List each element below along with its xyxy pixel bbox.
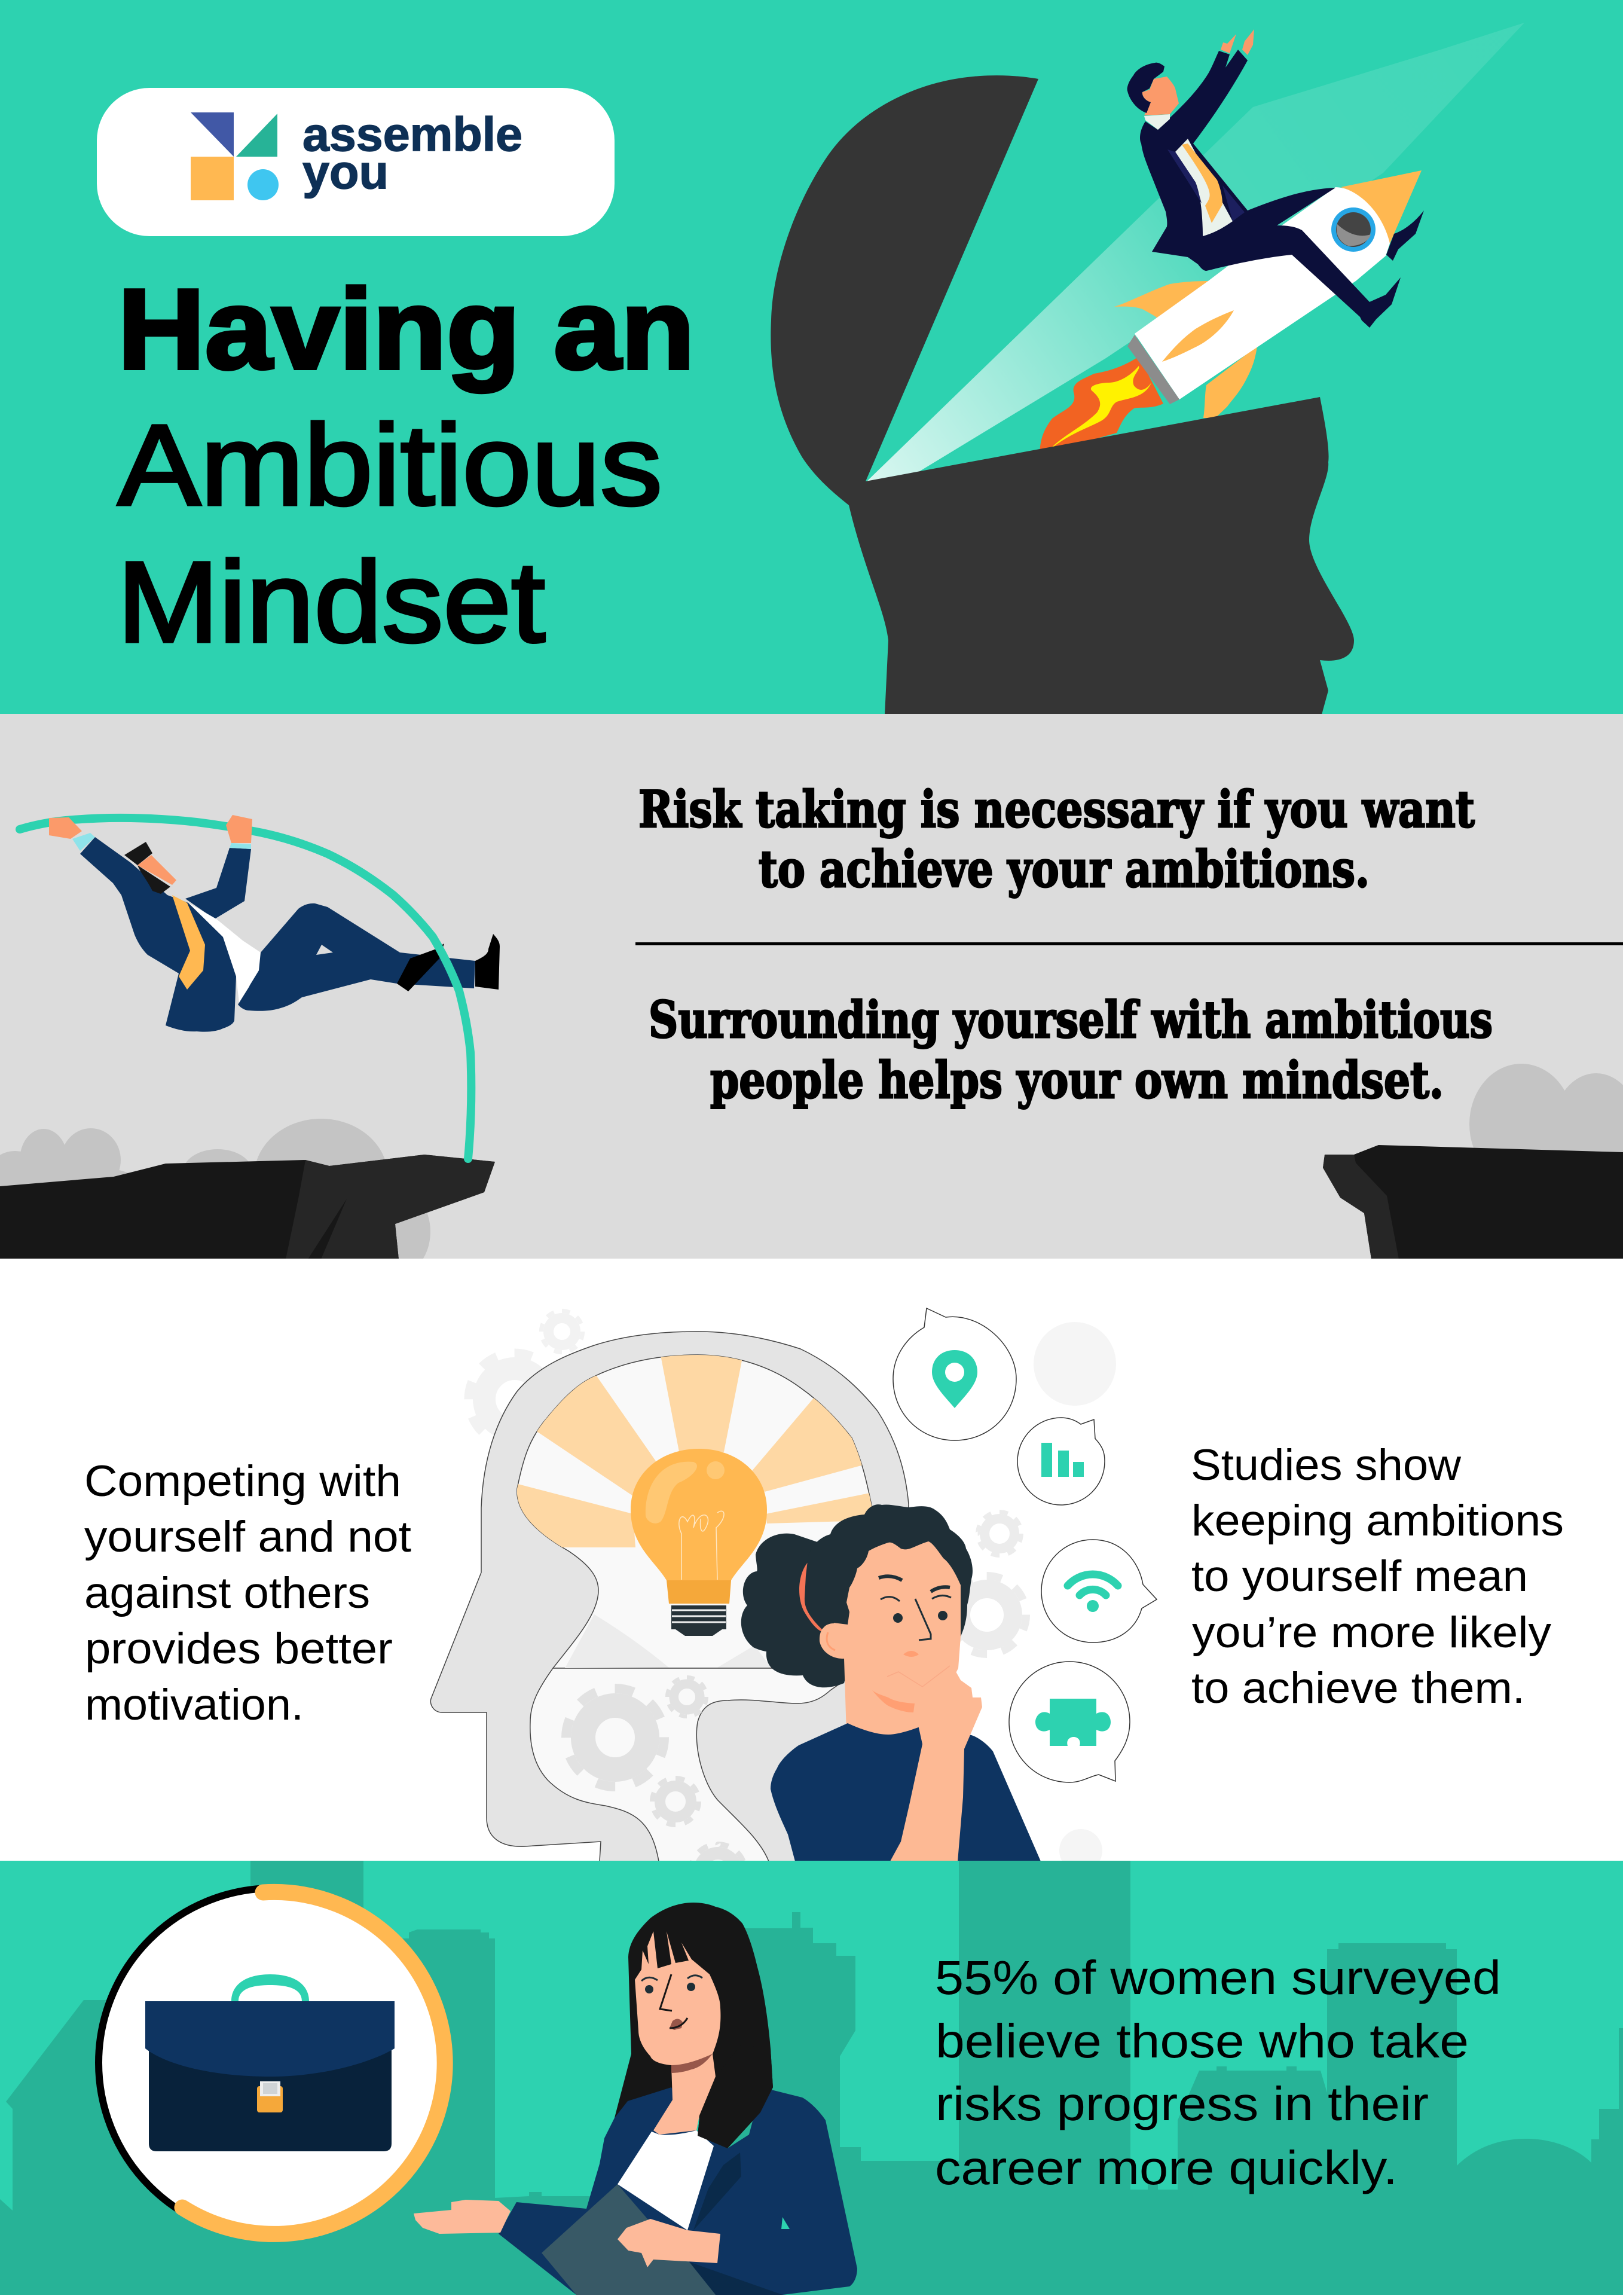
vaulter hands xyxy=(49,815,252,843)
text: competing with yourself: yourself and not xyxy=(84,1513,411,1561)
panel: thinking woman xyxy=(0,1259,1623,1899)
logo badge: assemble xyxy=(302,108,522,161)
title: Having an xyxy=(118,266,695,393)
speech bubble: wifi xyxy=(1041,1540,1157,1642)
text: competing with yourself xyxy=(84,1457,411,1729)
progress ring with briefcase xyxy=(99,1888,448,2237)
logo badge xyxy=(97,88,615,236)
title xyxy=(117,266,695,666)
panel: career xyxy=(0,1861,1623,2295)
statement one xyxy=(638,780,1475,899)
text: studies show: keeping ambitions xyxy=(1191,1497,1564,1545)
statement two xyxy=(649,990,1493,1110)
title: Ambitious xyxy=(118,401,662,529)
vaulting pole xyxy=(20,818,471,1159)
panel: hero xyxy=(0,0,1623,715)
background gears and dots xyxy=(469,1311,1116,1872)
man vaulting xyxy=(72,833,500,1032)
right cliff xyxy=(1323,1145,1623,1259)
statement one: Risk taking is necessary if you want xyxy=(638,780,1475,839)
statistic text xyxy=(935,1951,1501,2194)
text: studies show: to yourself mean xyxy=(1191,1552,1528,1601)
gears inside head xyxy=(566,1677,745,1899)
text: competing with yourself: against others xyxy=(84,1569,370,1617)
logo badge: you xyxy=(302,145,389,199)
title: Mindset xyxy=(117,538,545,666)
text: competing with yourself: Competing with xyxy=(84,1457,401,1506)
rocket xyxy=(1040,170,1422,454)
speech bubble: puzzle xyxy=(1009,1662,1130,1782)
head profile xyxy=(430,1332,909,1861)
statement one: to achieve your ambitions. xyxy=(759,839,1370,899)
speech bubble: location pin xyxy=(893,1308,1016,1440)
businessman on rocket xyxy=(1127,29,1424,328)
left cliff xyxy=(0,1155,495,1259)
open head silhouette xyxy=(771,75,1354,715)
text: competing with yourself: motivation. xyxy=(85,1681,304,1729)
city skyline xyxy=(0,1861,1623,2295)
light rays xyxy=(516,1355,872,1547)
speech bubble: bar chart xyxy=(1017,1418,1105,1505)
light beam xyxy=(866,23,1524,482)
statistic text: risks progress in their xyxy=(936,2077,1429,2130)
text: studies show: to achieve them. xyxy=(1191,1664,1525,1712)
clouds left xyxy=(0,1119,430,1274)
woman thinking xyxy=(741,1504,1041,1861)
text: studies show: you’re more likely xyxy=(1192,1608,1552,1657)
clouds right xyxy=(1459,1064,1623,1190)
text: competing with yourself: provides better xyxy=(85,1625,393,1673)
statistic text: believe those who take xyxy=(936,2014,1469,2068)
icon: briefcase xyxy=(145,1974,395,2151)
text: studies show: Studies show xyxy=(1191,1441,1461,1489)
panel: risk taking xyxy=(0,714,1623,1274)
icon: light bulb xyxy=(631,1449,767,1636)
statistic text: 55% of women surveyed xyxy=(935,1951,1501,2004)
text: studies show xyxy=(1191,1441,1564,1712)
woman presenting xyxy=(414,1903,857,2295)
statement two: people helps your own mindset. xyxy=(710,1051,1444,1110)
statistic text: career more quickly. xyxy=(935,2141,1398,2194)
